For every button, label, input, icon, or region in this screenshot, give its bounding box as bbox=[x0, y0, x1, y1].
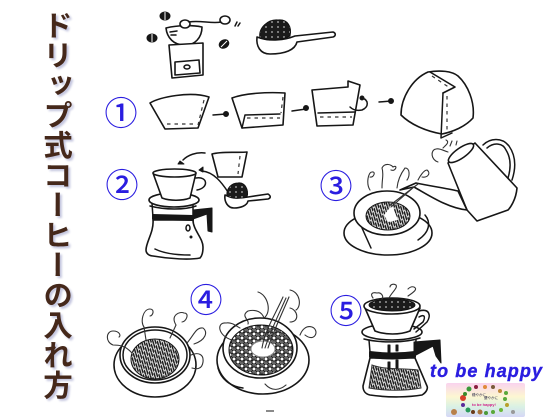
icon: pouring hot water on swollen grounds bbox=[217, 290, 316, 394]
badge: to be happy banner: to be happy! bbox=[472, 402, 496, 407]
icon: filter folded over bbox=[312, 81, 367, 126]
icon: scoop of grounds with arrow bbox=[199, 167, 270, 208]
icon: opened filter cone bbox=[401, 71, 473, 138]
icon: filter placed into dripper with arrow bbox=[178, 152, 247, 177]
arrow bbox=[213, 112, 228, 116]
icon: paper filter flat bbox=[150, 95, 209, 129]
icon: finished carafe with dripper bbox=[362, 284, 441, 397]
mark bbox=[266, 410, 274, 412]
icon: blooming grounds in dripper bbox=[107, 309, 206, 397]
number 2: ② bbox=[106, 159, 138, 207]
icon: coffee grinder with beans bbox=[147, 12, 240, 78]
number 1: ① bbox=[104, 87, 138, 135]
icon: kettle pouring over dripper bbox=[344, 140, 517, 255]
icon: measuring scoop with beans bbox=[257, 20, 335, 54]
icon: dripper on carafe bbox=[146, 169, 212, 259]
number 5: ⑤ bbox=[330, 285, 362, 333]
icon: filter folded once bbox=[232, 93, 285, 128]
badge: to be happy banner: 穏やかに bbox=[472, 392, 486, 398]
brand text: to be happy: to be happy bbox=[430, 361, 543, 381]
number 3: ③ bbox=[320, 160, 352, 208]
badge: to be happy banner: 健やかに bbox=[484, 395, 498, 401]
badge: to be happy banner bbox=[446, 383, 525, 417]
title: vertical heading: ドリップ式コーヒーの入れ方 bbox=[39, 10, 72, 400]
number 4: ④ bbox=[190, 274, 222, 322]
arrow bbox=[379, 98, 394, 104]
arrow bbox=[292, 106, 308, 111]
